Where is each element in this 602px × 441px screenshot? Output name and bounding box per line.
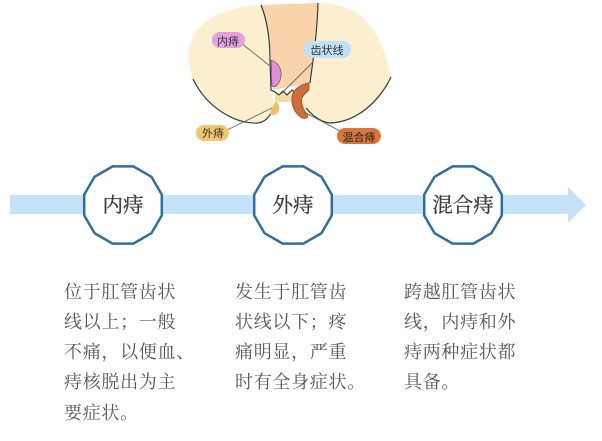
text: mixed hemorrhoid description: 线，内痔和外 — [404, 312, 516, 332]
external hemorrhoid shape — [270, 102, 279, 115]
node: 内痔 — [84, 166, 162, 244]
label: dentate line — [304, 41, 351, 58]
leader lines — [225, 43, 340, 131]
right cream tissue — [300, 3, 391, 123]
text: internal hemorrhoid description: 痔核脱出为主 — [64, 372, 176, 392]
label: external: 外痔 — [202, 125, 224, 141]
text: internal hemorrhoid description: 位于肛管齿状 — [64, 282, 176, 302]
text: external hemorrhoid description: 时有全身症状。 — [235, 372, 366, 392]
anal canal — [261, 3, 318, 90]
arrow — [10, 187, 586, 223]
text: external hemorrhoid description: 发生于肛管齿 — [235, 282, 347, 302]
node: 内痔: 内痔 — [102, 194, 144, 217]
label: mixed: 混合痔 — [342, 129, 376, 145]
label: dentate line: 齿状线 — [310, 42, 344, 58]
left cream tissue — [189, 5, 274, 123]
text: internal hemorrhoid description: 线以上；一般 — [64, 312, 176, 332]
text: external hemorrhoid description: 状线以下；疼 — [235, 312, 347, 332]
text: mixed hemorrhoid description: 痔两种症状都 — [404, 342, 516, 362]
text: mixed hemorrhoid description: 具备。 — [404, 372, 460, 392]
text: internal hemorrhoid description — [64, 282, 195, 423]
node: 混合痔: 混合痔 — [432, 194, 494, 217]
text: external hemorrhoid description: 痛明显，严重 — [235, 342, 347, 362]
text: internal hemorrhoid description: 要症状。 — [64, 403, 139, 423]
text: mixed hemorrhoid description — [404, 282, 516, 392]
outline strokes — [193, 3, 391, 123]
label: internal — [212, 32, 245, 49]
node: 混合痔 — [424, 166, 502, 244]
internal hemorrhoid shape — [271, 60, 281, 87]
text: external hemorrhoid description — [235, 282, 366, 392]
node: 外痔 — [254, 166, 332, 244]
dentate zone — [275, 90, 295, 102]
mixed hemorrhoid shape — [292, 83, 309, 118]
text: internal hemorrhoid description: 不痛，以便血、 — [64, 342, 195, 362]
label: external — [196, 125, 229, 141]
label: internal: 内痔 — [217, 33, 239, 49]
node: 外痔: 外痔 — [272, 194, 314, 217]
text: mixed hemorrhoid description: 跨越肛管齿状 — [404, 282, 516, 302]
